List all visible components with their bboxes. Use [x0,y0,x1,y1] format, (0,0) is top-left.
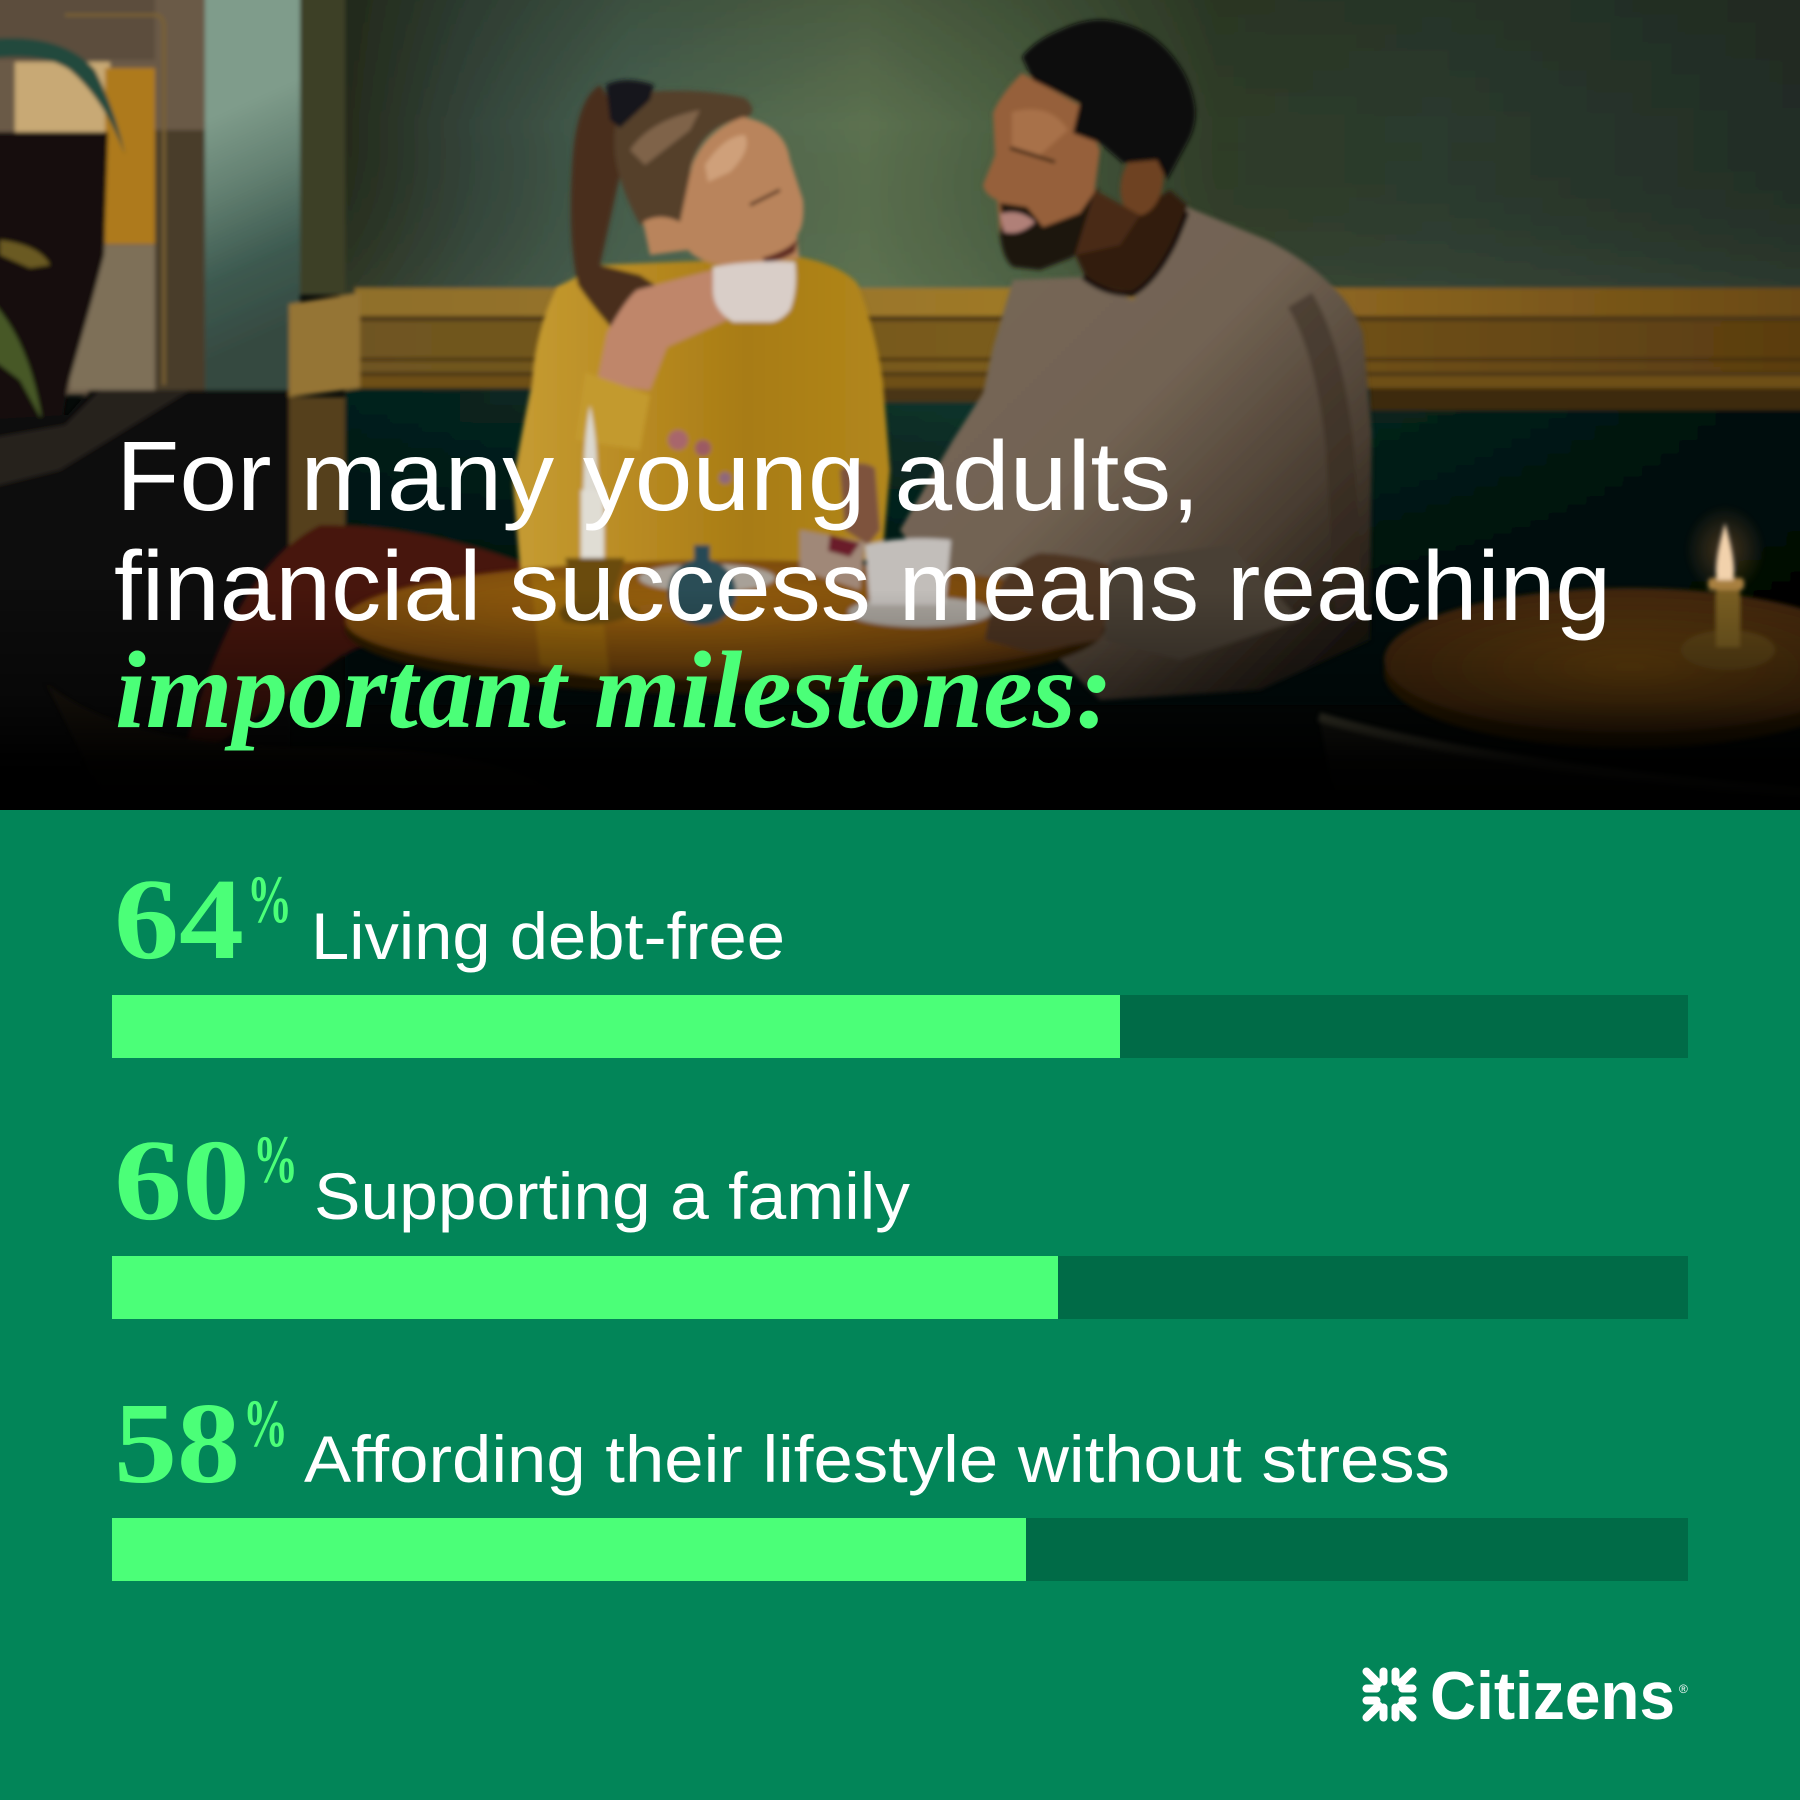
bar track [112,1518,1688,1581]
vase [0,132,108,435]
stat: 64% living debt-free: % [247,861,292,937]
stat: 58% affording lifestyle: 58 [114,1380,240,1508]
icon: Citizens mark [1366,1672,1412,1718]
wall [340,0,1800,300]
face [643,117,803,268]
cup [713,262,796,322]
stat: 64% living debt-free [112,856,1688,1058]
stat: 60% supporting a family: Supporting a family [314,1159,910,1233]
bar value 64% [112,995,1120,1058]
stat: 60% supporting a family: 60 [114,1117,250,1245]
stat: 58% affording lifestyle: Affording their lifestyle without stress [304,1422,1450,1496]
window recess [0,0,210,395]
sweater [900,207,1372,700]
hand right [985,553,1120,652]
sleeve [1105,545,1300,660]
tableware [639,564,775,592]
beard [1000,187,1103,270]
table right [1384,596,1800,748]
logo: Citizens: Citizens [1430,1658,1675,1734]
stat: 58% affording lifestyle: % [243,1385,288,1461]
heading: financial success means reaching [114,531,1611,641]
face [983,73,1100,235]
stat: 64% living debt-free: 64 [114,856,244,984]
dark overlay [0,590,1800,810]
logo: Citizens: ® [1679,1682,1688,1696]
chairs [46,683,580,810]
icon: woman [513,80,890,570]
icon: man [840,20,1372,700]
lamp panel [15,62,110,134]
candle [581,405,604,560]
heading: important milestones: [115,629,1113,751]
photo: couple at a cafe table [0,0,1800,830]
sill [0,390,290,830]
hand [597,270,727,390]
candle right [1685,505,1765,595]
hair [1022,20,1195,180]
flowers [668,430,688,450]
stat: 60% supporting a family: % [253,1121,298,1197]
ear [1115,146,1169,220]
gold frame [65,15,164,385]
stat: 64% living debt-free: Living debt-free [311,899,785,973]
bar track [112,995,1688,1058]
scrunchie [606,80,654,128]
wood post [289,293,360,397]
hair [614,91,752,225]
table left [345,562,1105,694]
heading: For many young adults, [116,421,1200,531]
wood panel [355,288,1800,318]
ponytail [571,85,655,335]
neck [1073,190,1187,292]
bar track [112,1256,1688,1319]
heading [114,421,1611,751]
lower banquette [342,386,1800,664]
stat: 60% supporting a family [112,1117,1688,1319]
hand [840,463,880,545]
stat: 58% affording lifestyle [112,1380,1688,1581]
bar value 58% [112,1518,1026,1581]
red chair [188,522,522,742]
bar value 60% [112,1256,1058,1319]
sweater [513,257,890,570]
